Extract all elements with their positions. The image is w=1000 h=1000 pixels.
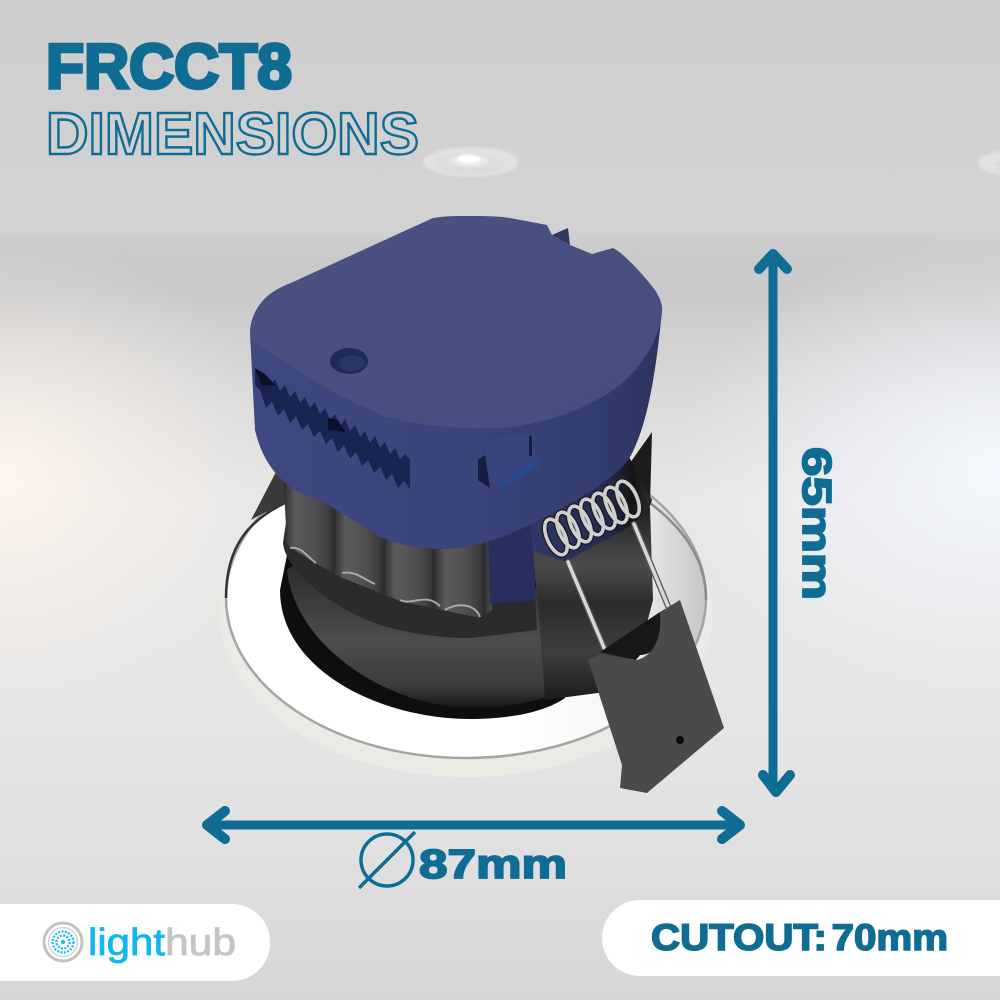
heat sink fins (283, 470, 492, 618)
panel: cutout pill (602, 900, 1000, 976)
subtitle: DIMENSIONS outlined: DIMENSIONS (46, 101, 419, 167)
label: 65mm: 65mm (794, 447, 840, 600)
product: FRCCT8 downlight (220, 216, 724, 793)
logo wordmark: light (88, 922, 165, 964)
recess and black cup (280, 540, 565, 719)
screw hole (330, 348, 368, 374)
icon: distant ceiling downlight right (978, 151, 1000, 175)
rear strut (625, 432, 652, 512)
cable entry slot (255, 368, 410, 489)
heat sink collar (283, 515, 537, 638)
shadow behind spring (530, 455, 652, 565)
torsion spring coils (540, 478, 644, 558)
logo wordmark: hub (165, 922, 236, 964)
title: FRCCT8: FRCCT8 (46, 32, 292, 102)
box top face (250, 216, 662, 429)
clip plate notch (600, 612, 661, 660)
label: 87mm: 87mm (419, 841, 567, 887)
icon: lighthub logo mark (44, 923, 82, 961)
label: cutout size: CUTOUT: 70mm (651, 917, 948, 958)
junction box (250, 216, 662, 549)
spring wires (568, 524, 668, 650)
logo wordmark (88, 922, 236, 964)
fin highlights (290, 548, 480, 617)
flange: white trim ring (220, 438, 712, 777)
arrow: height dimension (759, 254, 790, 792)
box notch (552, 228, 570, 245)
box side (250, 310, 662, 549)
spring bracket (533, 507, 653, 700)
icon: distant ceiling downlight centre (423, 147, 519, 177)
retaining tab (478, 433, 540, 490)
left spring clip (251, 470, 292, 520)
icon: diameter symbol (359, 832, 415, 888)
panel: brand logo pill (0, 904, 270, 981)
arrow: diameter dimension (207, 811, 740, 839)
navy inner panel (488, 510, 537, 604)
spring clip plate (588, 600, 724, 793)
